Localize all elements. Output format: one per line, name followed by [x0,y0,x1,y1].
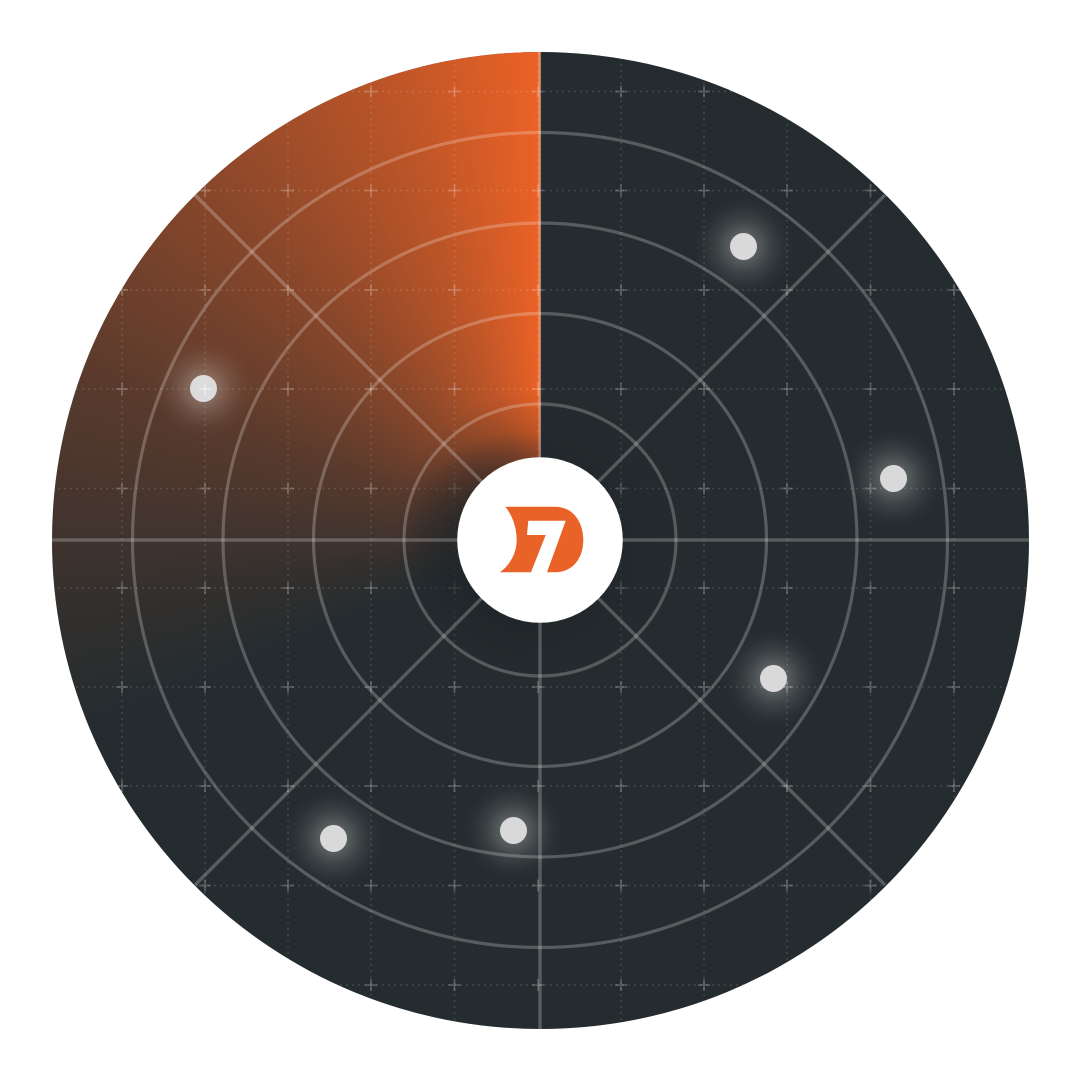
hub shadow on sweep [423,437,540,618]
hub shadow [424,399,630,594]
sweep edge line [538,40,541,540]
icon: logo mark [500,507,583,572]
blip 2 [154,338,254,438]
blip 4 [724,628,824,728]
blip 5 [464,780,564,880]
radar spokes [40,195,1040,1040]
blip 1 [694,196,794,296]
radar rings [132,132,948,948]
blip 3 [844,428,944,528]
blip 6 [284,788,384,888]
center hub [457,457,623,623]
grid crosses [116,86,960,991]
